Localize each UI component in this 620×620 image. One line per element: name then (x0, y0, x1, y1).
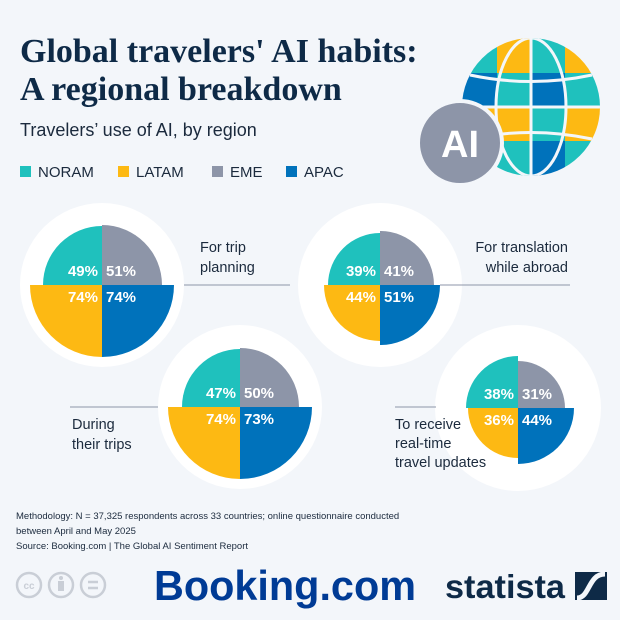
chart: real-time updates: 36% (484, 412, 514, 429)
chart: during trips: 73% (244, 411, 274, 428)
title: Global travelers' AI habits: (20, 33, 418, 70)
chart: real-time updates: 44% (522, 412, 552, 429)
label: during trips: their trips (72, 437, 132, 453)
title (20, 33, 418, 108)
legend: EME (230, 164, 263, 181)
label: during trips (70, 407, 158, 453)
chart: real-time updates (435, 325, 601, 491)
chart: for trip planning: 74% (106, 289, 136, 306)
methodology and source: Methodology: N = 37,325 respondents across 33 countries; online questionnaire conducted (16, 511, 399, 522)
title: A regional breakdown (20, 71, 342, 108)
chart: for trip planning (20, 203, 184, 367)
chart: for translation: 41% (384, 263, 414, 280)
label: for translation: while abroad (485, 260, 568, 276)
label: real-time updates: To receive (395, 417, 461, 433)
chart: for trip planning: 74% (68, 289, 98, 306)
subtitle: Travelers’ use of AI, by region (20, 120, 257, 140)
icon: globe with AI: AI (441, 124, 479, 166)
label: real-time updates: real-time (395, 436, 451, 452)
label: during trips: During (72, 417, 115, 433)
chart: for trip planning: 51% (106, 263, 136, 280)
legend: APAC (304, 164, 344, 181)
chart: during trips: 50% (244, 385, 274, 402)
label: for trip planning (184, 240, 290, 285)
logo: booking.com: Booking.com (154, 562, 416, 609)
chart: for translation: 39% (346, 263, 376, 280)
legend (20, 164, 344, 181)
label: real-time updates: travel updates (395, 455, 486, 471)
icon: cc license: cc (23, 581, 35, 592)
chart: for translation: 44% (346, 289, 376, 306)
chart: during trips (158, 325, 322, 489)
chart: for translation: 51% (384, 289, 414, 306)
chart: during trips: 74% (206, 411, 236, 428)
legend: NORAM (38, 164, 94, 181)
icon: globe with AI (418, 30, 605, 185)
logo: statista: statista (445, 568, 566, 605)
methodology and source: between April and May 2025 (16, 526, 136, 537)
label: for translation (440, 240, 570, 285)
label: real-time updates (395, 407, 486, 471)
chart: for trip planning: 49% (68, 263, 98, 280)
label: for translation: For translation (475, 240, 568, 256)
label: for trip planning: planning (200, 260, 255, 276)
chart: real-time updates: 38% (484, 386, 514, 403)
methodology and source (16, 511, 399, 552)
methodology and source: Source: Booking.com | The Global AI Sentiment Report (16, 541, 248, 552)
chart: during trips: 47% (206, 385, 236, 402)
legend: LATAM (136, 164, 184, 181)
chart: real-time updates: 31% (522, 386, 552, 403)
chart: for translation (298, 203, 462, 367)
label: for trip planning: For trip (200, 240, 246, 256)
icon: cc license (17, 573, 105, 597)
